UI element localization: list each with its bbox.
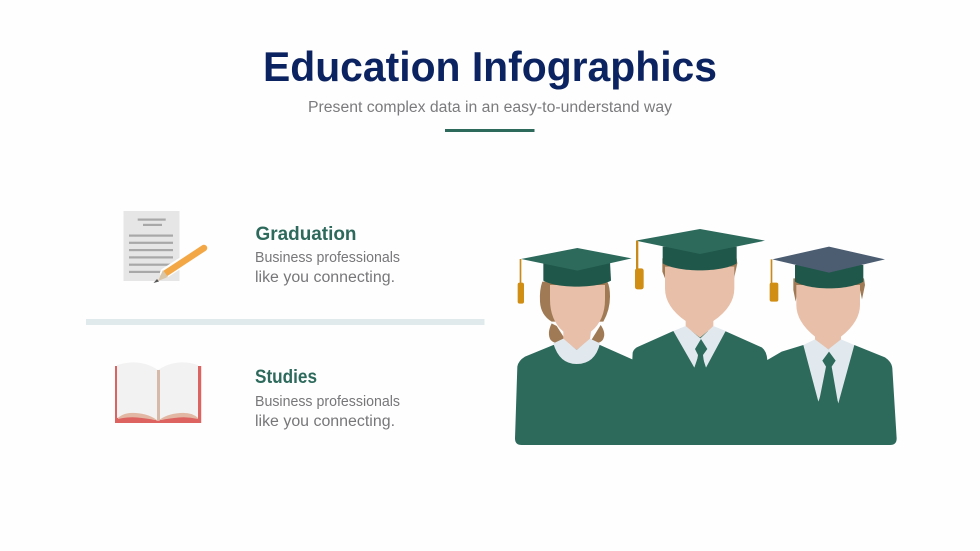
- illustration: three graduates: [515, 229, 897, 445]
- text: Graduation description: Business professionals: [255, 250, 400, 266]
- label: Graduation: Graduation: [256, 224, 356, 245]
- text: Studies description: like you connecting.: [255, 413, 395, 430]
- icon: document and pencil: [124, 211, 204, 283]
- text: Studies description: [255, 394, 400, 430]
- subtitle: Present complex data in an easy-to-understand way: [308, 99, 672, 116]
- graduate: centre man: [635, 229, 765, 370]
- text: Graduation description: like you connecting.: [255, 269, 395, 286]
- title: Education Infographics: [263, 43, 717, 90]
- label: Studies: Studies: [255, 367, 317, 388]
- divider: [86, 319, 484, 325]
- graduate: right man: [770, 247, 885, 405]
- text: Studies description: Business professionals: [255, 394, 400, 410]
- graduate: woman: [518, 248, 632, 364]
- icon: open book: [115, 362, 201, 423]
- title underline: [445, 129, 534, 132]
- gowns: [515, 331, 897, 445]
- text: Graduation description: [255, 250, 400, 286]
